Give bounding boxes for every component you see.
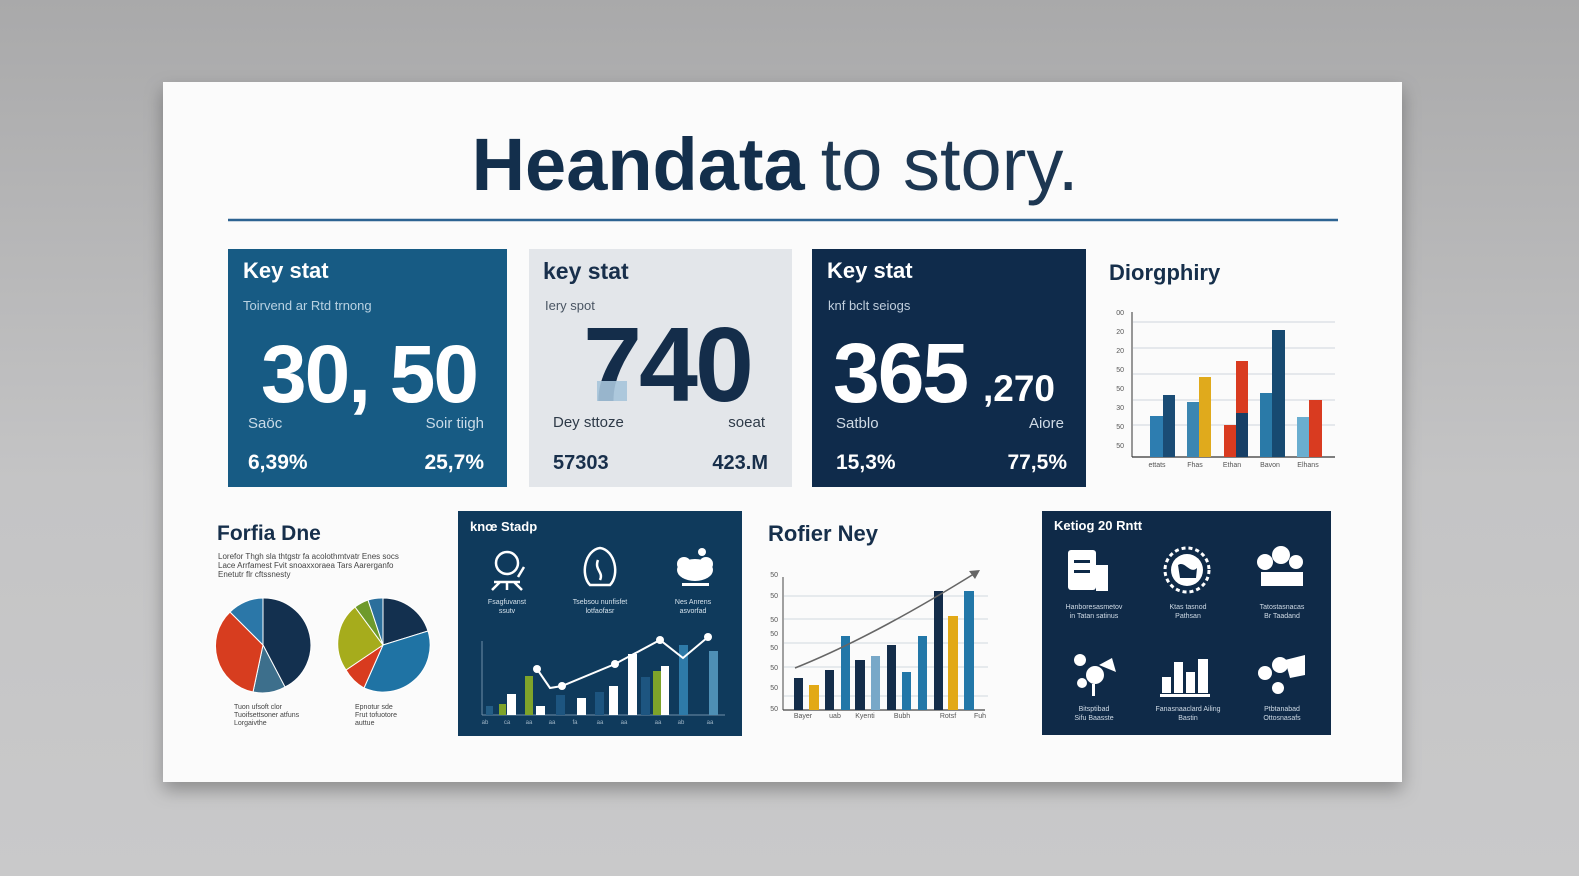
icon: person [492, 552, 524, 590]
panel: key stat 1: 6,39% [248, 451, 308, 474]
panel: Knw Stadp: Nes Anrens [675, 599, 712, 606]
panel: Rofier Ney bar chart: Rofier Ney [768, 521, 879, 546]
panel: key stat 3: knf bclt seiogs [828, 298, 911, 313]
panel: Knw Stadp: aa [549, 720, 556, 726]
panel: Diorgphiry bar chart: 50 [1116, 443, 1124, 450]
panel: Diorgphiry bar chart: ettats [1148, 462, 1166, 469]
panel: Diorgphiry bar chart: Fhas [1187, 462, 1203, 469]
panel: Knw Stadp: Tsebsou nunfisfet [573, 599, 627, 606]
panel: Knw Stadp: fa [572, 720, 578, 726]
panel: Ketiog 20 Rntt icons: Ottosnasafs [1263, 715, 1301, 722]
panel: Rofier Ney bar chart [768, 521, 988, 720]
panel: key stat 1: Soir tiigh [426, 415, 484, 432]
arrow: trend [795, 570, 980, 668]
panel: key stat 3: 15,3% [836, 451, 896, 474]
panel: Ketiog 20 Rntt icons: in Tatan satinus [1070, 613, 1119, 620]
panel: Forfia Dne pie charts: Tuon ufsoft clor [234, 704, 283, 711]
panel: key stat 3: Aiore [1029, 415, 1064, 432]
panel: key stat 2: 423.M [712, 452, 768, 474]
panel: key stat 1: Saöc [248, 415, 283, 432]
panel: Diorgphiry bar chart: 50 [1116, 386, 1124, 393]
panel: Ketiog 20 Rntt icons: Pathsan [1175, 613, 1201, 620]
panel: Knw Stadp: aa [655, 720, 662, 726]
panel: key stat 1: Key stat [243, 258, 329, 283]
panel: Forfia Dne pie charts: Tuoifsettsoner atfuns [234, 712, 300, 719]
panel: key stat 2 [529, 249, 792, 487]
panel: Knw Stadp: ssutv [499, 608, 516, 615]
panel: key stat 1: 25,7% [424, 451, 484, 474]
panel: Rofier Ney bar chart: 50 [770, 685, 778, 692]
icon: network [1074, 654, 1116, 696]
panel: key stat 2: soeat [728, 414, 766, 431]
panel: Rofier Ney bar chart: Fuh [974, 713, 986, 720]
panel: Ketiog 20 Rntt icons: Sifu Baasste [1074, 715, 1114, 722]
pie 2 [338, 598, 430, 692]
panel: Forfia Dne pie charts [215, 522, 430, 727]
panel: Ketiog 20 Rntt icons: Bastin [1178, 715, 1198, 722]
panel: Rofier Ney bar chart: Rotsf [940, 713, 956, 720]
panel: Knw Stadp: ab [482, 720, 489, 726]
panel: key stat 3: 77,5% [1007, 451, 1067, 474]
icon: globe [1165, 548, 1209, 592]
panel: Knw Stadp: lotfaofasr [586, 608, 615, 615]
panel: Rofier Ney bar chart: 50 [770, 645, 778, 652]
panel: Rofier Ney bar chart: Bubh [894, 713, 910, 720]
panel: key stat 3: 365 [833, 326, 967, 420]
panel: Knw Stadp: asvorfad [680, 608, 707, 615]
panel: Knw Stadp: aa [707, 720, 714, 726]
panel: Diorgphiry bar chart: Bavon [1260, 462, 1280, 469]
panel: Forfia Dne pie charts: Epnotur sde [355, 704, 393, 711]
panel: key stat 2: Dey sttoze [553, 414, 624, 431]
card background [163, 82, 1402, 782]
panel: Forfia Dne pie charts: Frut tofuotore [355, 712, 397, 719]
panel: Ketiog 20 Rntt icons: Br Taadand [1264, 613, 1300, 620]
panel: Diorgphiry bar chart: Diorgphiry [1109, 260, 1221, 285]
panel: Diorgphiry bar chart: 50 [1116, 424, 1124, 431]
panel: Diorgphiry bar chart: 30 [1116, 405, 1124, 412]
panel: Rofier Ney bar chart: Bayer [794, 713, 813, 720]
panel: Diorgphiry bar chart: 50 [1116, 367, 1124, 374]
icon: bar chart [1160, 659, 1210, 697]
panel: Ketiog 20 Rntt icons: Bitsptibad [1079, 706, 1109, 713]
panel: key stat 3: Satblo [836, 415, 879, 432]
panel: Forfia Dne pie charts: auttue [355, 720, 375, 727]
panel: Knw Stadp: ca [504, 720, 511, 726]
panel: Rofier Ney bar chart: 50 [770, 617, 778, 624]
panel: key stat 2: 740 [583, 306, 751, 424]
panel: Rofier Ney bar chart: uab [829, 713, 841, 720]
panel: Ketiog 20 Rntt icons: Fanasnaaclard Ailing [1156, 706, 1221, 713]
icon: cloud [677, 548, 713, 586]
panel: key stat 3: Key stat [827, 258, 913, 283]
panel: Rofier Ney bar chart: Kyenti [855, 713, 875, 720]
panel: Forfia Dne pie charts: Forfia Dne [217, 522, 321, 545]
icon: head [585, 548, 615, 585]
panel: Ketiog 20 Rntt icons [1042, 511, 1331, 735]
panel: key stat 2: key stat [543, 258, 629, 284]
title: Heandatato story. [472, 123, 1078, 206]
panel: key stat 3 [812, 249, 1086, 487]
panel: Forfia Dne pie charts: Lorefor Thgh sla thtgstr fa acolothmtvatr Enes socs [218, 552, 399, 561]
panel: key stat 2: Iery spot [545, 298, 595, 313]
panel: Rofier Ney bar chart: 50 [770, 593, 778, 600]
panel: Diorgphiry bar chart: 20 [1116, 348, 1124, 355]
panel: Diorgphiry bar chart: 20 [1116, 329, 1124, 336]
panel: Knw Stadp: aa [597, 720, 604, 726]
panel: Knw Stadp: Fsagfuvanst [488, 599, 526, 606]
icon: document [1068, 550, 1108, 591]
panel: Knw Stadp: aa [621, 720, 628, 726]
panel: Ketiog 20 Rntt icons: Hanboresasmetov [1066, 604, 1123, 611]
panel: Ketiog 20 Rntt icons: Ptbtanabad [1264, 706, 1300, 713]
panel: Knw Stadp [458, 511, 742, 736]
panel: Diorgphiry bar chart: Elhans [1297, 462, 1319, 469]
panel: Rofier Ney bar chart: 50 [770, 706, 778, 713]
panel: Diorgphiry bar chart: Ethan [1223, 462, 1241, 469]
panel: key stat 3: ,270 [983, 368, 1055, 409]
panel: Diorgphiry bar chart [1109, 260, 1335, 469]
panel: key stat 1: 30, 50 [261, 329, 477, 420]
panel: key stat 2: 57303 [553, 452, 609, 474]
panel: Forfia Dne pie charts: Lorgaivthe [234, 720, 267, 727]
panel: Ketiog 20 Rntt icons: Ktas tasnod [1170, 604, 1207, 611]
panel: key stat 1: Toirvend ar Rtd trnong [243, 298, 372, 313]
icon: people crown [1257, 546, 1303, 586]
icon: gears [1258, 655, 1305, 694]
panel: Knw Stadp: knœ Stadp [470, 519, 537, 534]
panel: Forfia Dne pie charts: Enetutr flr cftssnesty [218, 570, 290, 579]
panel: Ketiog 20 Rntt icons: Tatostasnacas [1260, 604, 1305, 611]
panel: Ketiog 20 Rntt icons: Ketiog 20 Rntt [1054, 518, 1143, 533]
panel: Rofier Ney bar chart: 50 [770, 572, 778, 579]
panel: Knw Stadp: ab [678, 720, 685, 726]
panel: Rofier Ney bar chart: 50 [770, 631, 778, 638]
panel: Diorgphiry bar chart: 00 [1116, 310, 1124, 317]
panel: Knw Stadp: aa [526, 720, 533, 726]
panel: key stat 1 [228, 249, 507, 487]
panel: Forfia Dne pie charts: Lace Arrfamest Fvit snoaxxoraea Tars Aarerganfo [218, 561, 394, 570]
pie 1 [215, 598, 311, 693]
panel: Rofier Ney bar chart: 50 [770, 665, 778, 672]
